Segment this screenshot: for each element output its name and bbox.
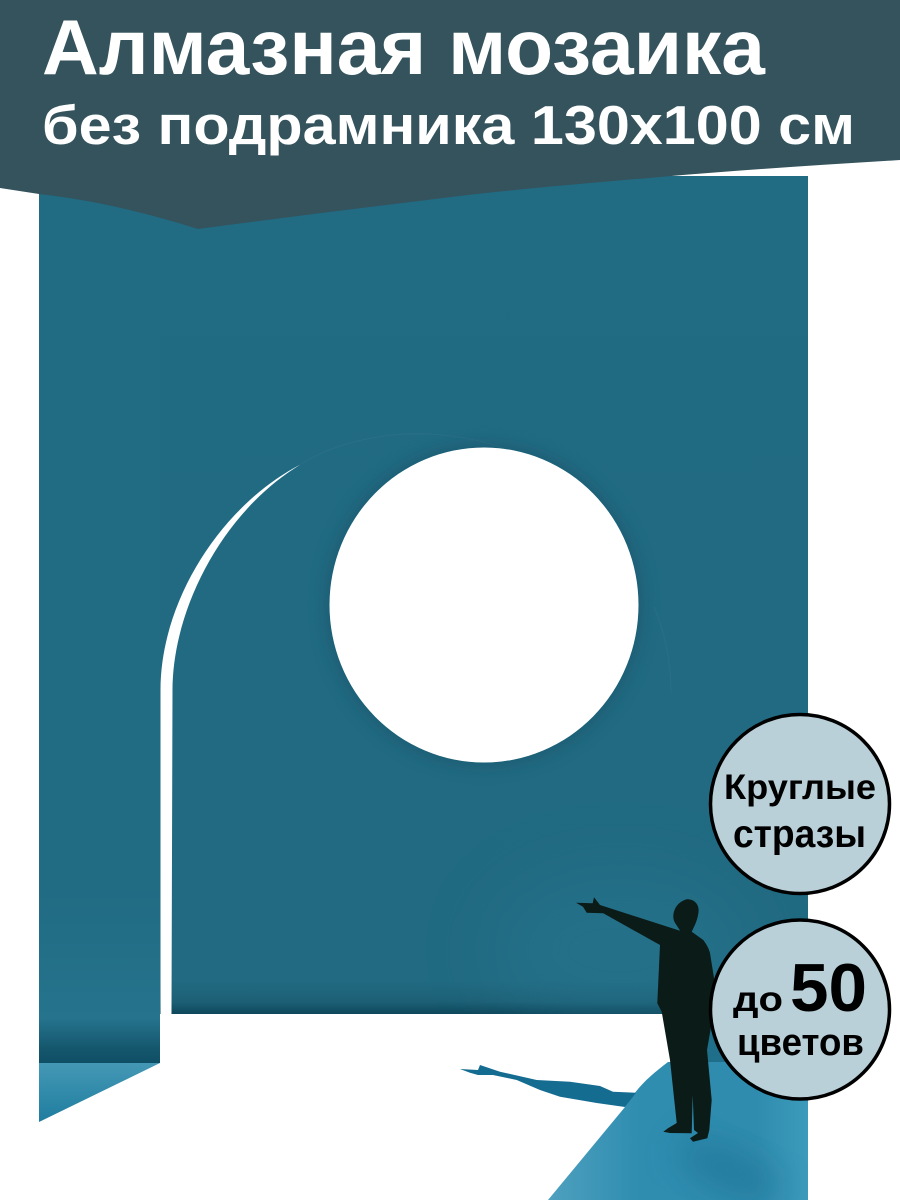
badge: up to 50 colours: [710, 920, 890, 1099]
circle shadow: [326, 444, 642, 766]
badge: round rhinestones: стразы: [733, 813, 866, 856]
badge: round rhinestones: Круглые: [724, 768, 876, 807]
human silhouette pointing: [576, 897, 714, 1142]
left floor wedge: [39, 1063, 160, 1122]
badge: up to 50 colours: 50: [790, 950, 867, 1026]
title: second line: без подрамника 130х100 см: [42, 94, 855, 156]
badge: round rhinestones: [710, 714, 890, 894]
white moon circle: [330, 448, 638, 762]
badge: up to 50 colours: до: [733, 980, 783, 1019]
faint arch outline: [301, 434, 671, 693]
right floor platform: [548, 1062, 808, 1200]
arm shadow on floor: [460, 1065, 636, 1107]
badge: up to 50 colours: цветов: [737, 1022, 864, 1064]
header banner: [0, 0, 900, 229]
left wall column: [39, 176, 160, 1063]
white arch stripe: [160, 464, 300, 1014]
background panel: teal wall: [160, 176, 808, 1062]
title: main line: Алмазная мозаика: [42, 3, 766, 91]
